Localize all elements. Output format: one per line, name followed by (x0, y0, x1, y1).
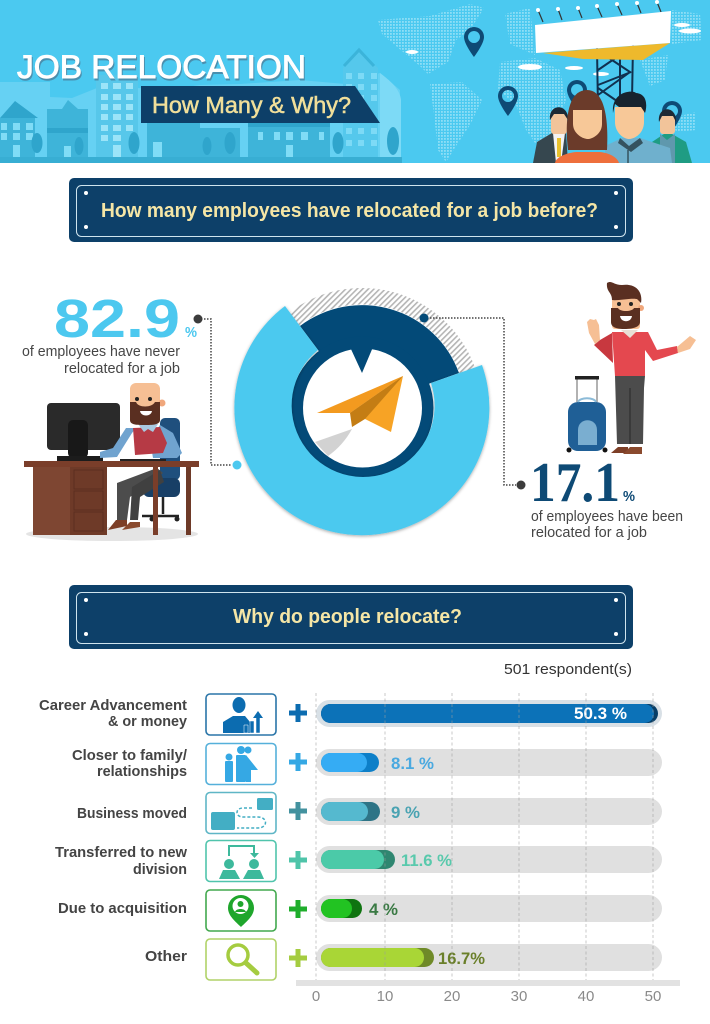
bar tracks (316, 700, 662, 971)
icon: business moved (206, 792, 276, 834)
illustration: man at desk (24, 383, 199, 541)
chart axis: 40 (578, 988, 594, 1005)
clouds (406, 23, 701, 76)
bar: business 9 (321, 802, 420, 822)
bar: transfer 11.6 (321, 850, 452, 870)
bar: family 8.1: 8.1 % (391, 754, 434, 773)
stat: 82.9 percent: % (185, 324, 197, 341)
chart axis: 10 (377, 988, 393, 1005)
bar: career advancement 50.3: 50.3 % (574, 704, 627, 723)
subtitle ribbon: How Many & Why? (152, 92, 351, 118)
section heading: how many: How many employees have relocated for a job before? (101, 200, 598, 222)
stat: 17.1 percent: relocated for a job (531, 524, 647, 541)
title: JOB RELOCATION (17, 49, 306, 85)
row labels: division (133, 861, 187, 878)
stat: 17.1 percent: 17.1 (530, 452, 620, 514)
chart axis: 20 (444, 988, 460, 1005)
stat: 17.1 percent: of employees have been (531, 508, 683, 525)
map pins (464, 27, 682, 131)
bar: other 16.7: 16.7% (438, 949, 485, 968)
stat: 17.1 percent: % (623, 488, 635, 505)
chart axis: 0 (312, 988, 320, 1005)
bar: acquisition 4: 4 % (369, 900, 398, 919)
chart axis: 30 (511, 988, 527, 1005)
paper plane icon (315, 376, 403, 456)
bar: acquisition 4 (321, 899, 398, 919)
bar: other 16.7 (321, 948, 485, 968)
header banner (0, 0, 710, 163)
stat: 82.9 percent: relocated for a job (64, 360, 180, 377)
stat: 82.9 percent: 82.9 (54, 289, 180, 349)
navy segment (300, 305, 459, 408)
chart axis: 50 (645, 988, 661, 1005)
icon: magnifier (206, 939, 276, 980)
stat: 82.9 percent (22, 289, 197, 377)
row labels: Career Advancement (39, 697, 187, 714)
row labels: Transferred to new (55, 844, 187, 861)
row labels: relationships (97, 763, 187, 780)
plus signs (289, 704, 307, 967)
connector: 82.9 to donut (194, 314, 242, 470)
row labels: Due to acquisition (58, 900, 187, 917)
section heading: how many (69, 178, 633, 242)
bar: career advancement 50.3 (321, 704, 658, 723)
bar: business 9: 9 % (391, 803, 420, 822)
subtitle ribbon (141, 86, 380, 123)
respondent count: 501 respondent(s) (504, 661, 632, 678)
stat: 17.1 percent (530, 452, 683, 541)
illustration: standing man with suitcase (566, 282, 696, 454)
bar: transfer 11.6: 11.6 % (401, 851, 452, 870)
people group (533, 90, 692, 163)
row labels: & or money (108, 713, 188, 730)
row labels: Other (145, 948, 187, 965)
section heading: why (69, 585, 633, 649)
light blue segment 82.9 (234, 306, 489, 535)
connector: donut to 17.1 (420, 314, 526, 490)
icon: acquisition (206, 890, 276, 931)
icon: career advancement (206, 694, 276, 735)
stat: 82.9 percent: of employees have never (22, 343, 180, 360)
billboard (535, 0, 671, 110)
row labels: Closer to family/ (72, 747, 188, 764)
city skyline (0, 50, 402, 163)
donut chart (234, 288, 489, 535)
row labels: Business moved (77, 805, 187, 822)
bar: family 8.1 (321, 753, 434, 773)
icon: transfer (206, 840, 276, 882)
chart axis (296, 693, 680, 1005)
world map (378, 4, 702, 162)
hatched ring background (242, 288, 482, 528)
icon: family (206, 744, 276, 784)
section heading: why: Why do people relocate? (233, 606, 462, 628)
row labels (39, 697, 188, 965)
